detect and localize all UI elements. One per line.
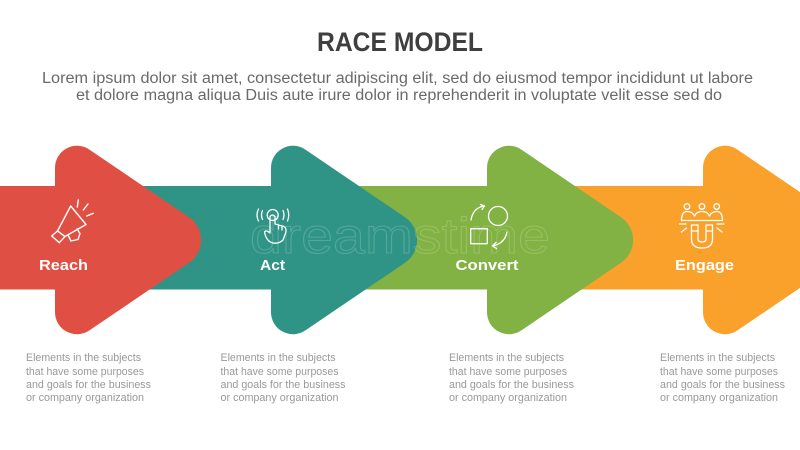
description: engage: Elements in the subjects — [660, 352, 775, 364]
icon: engage magnet and people — [680, 204, 724, 248]
description: reach — [26, 352, 151, 404]
description: reach: that have some purposes — [26, 366, 144, 378]
arrow: act — [130, 146, 417, 334]
description: convert: Elements in the subjects — [449, 352, 564, 364]
icon: megaphone — [52, 200, 93, 243]
label: Reach: Reach — [39, 258, 88, 274]
description: reach: and goals for the business — [26, 379, 151, 391]
title: RACE MODEL — [317, 27, 483, 57]
watermark: dreamstime — [250, 208, 550, 264]
icon: touch hand — [257, 209, 289, 243]
description: convert: that have some purposes — [449, 366, 567, 378]
description: convert: and goals for the business — [449, 379, 574, 391]
subtitle: Lorem ipsum dolor sit amet, consectetur adipiscing elit, sed do eiusmod tempor incididunt ut labore — [42, 70, 753, 87]
description: act — [220, 352, 346, 404]
arrow: convert — [345, 146, 633, 334]
description: engage: and goals for the business — [660, 379, 785, 391]
label: Engage: Engage — [675, 258, 734, 274]
description: convert — [449, 352, 574, 404]
description: reach: Elements in the subjects — [26, 352, 141, 364]
subtitle: et dolore magna aliqua Duis aute irure dolor in reprehenderit in voluptate velit esse sed do — [76, 87, 722, 104]
description: engage — [660, 352, 785, 404]
arrow: reach — [0, 146, 201, 334]
arrow: engage — [560, 146, 800, 334]
icon: convert cycle — [471, 204, 508, 248]
label: Convert: Convert — [456, 258, 519, 274]
description: act: Elements in the subjects — [220, 352, 336, 364]
description: convert: or company organization — [449, 392, 567, 404]
label: Act: Act — [260, 258, 285, 274]
description: act: and goals for the business — [220, 379, 346, 391]
subtitle — [42, 70, 753, 104]
description: engage: or company organization — [660, 392, 778, 404]
description: reach: or company organization — [26, 392, 144, 404]
description: act: that have some purposes — [220, 366, 339, 378]
description: engage: that have some purposes — [660, 366, 778, 378]
description: act: or company organization — [220, 392, 338, 404]
